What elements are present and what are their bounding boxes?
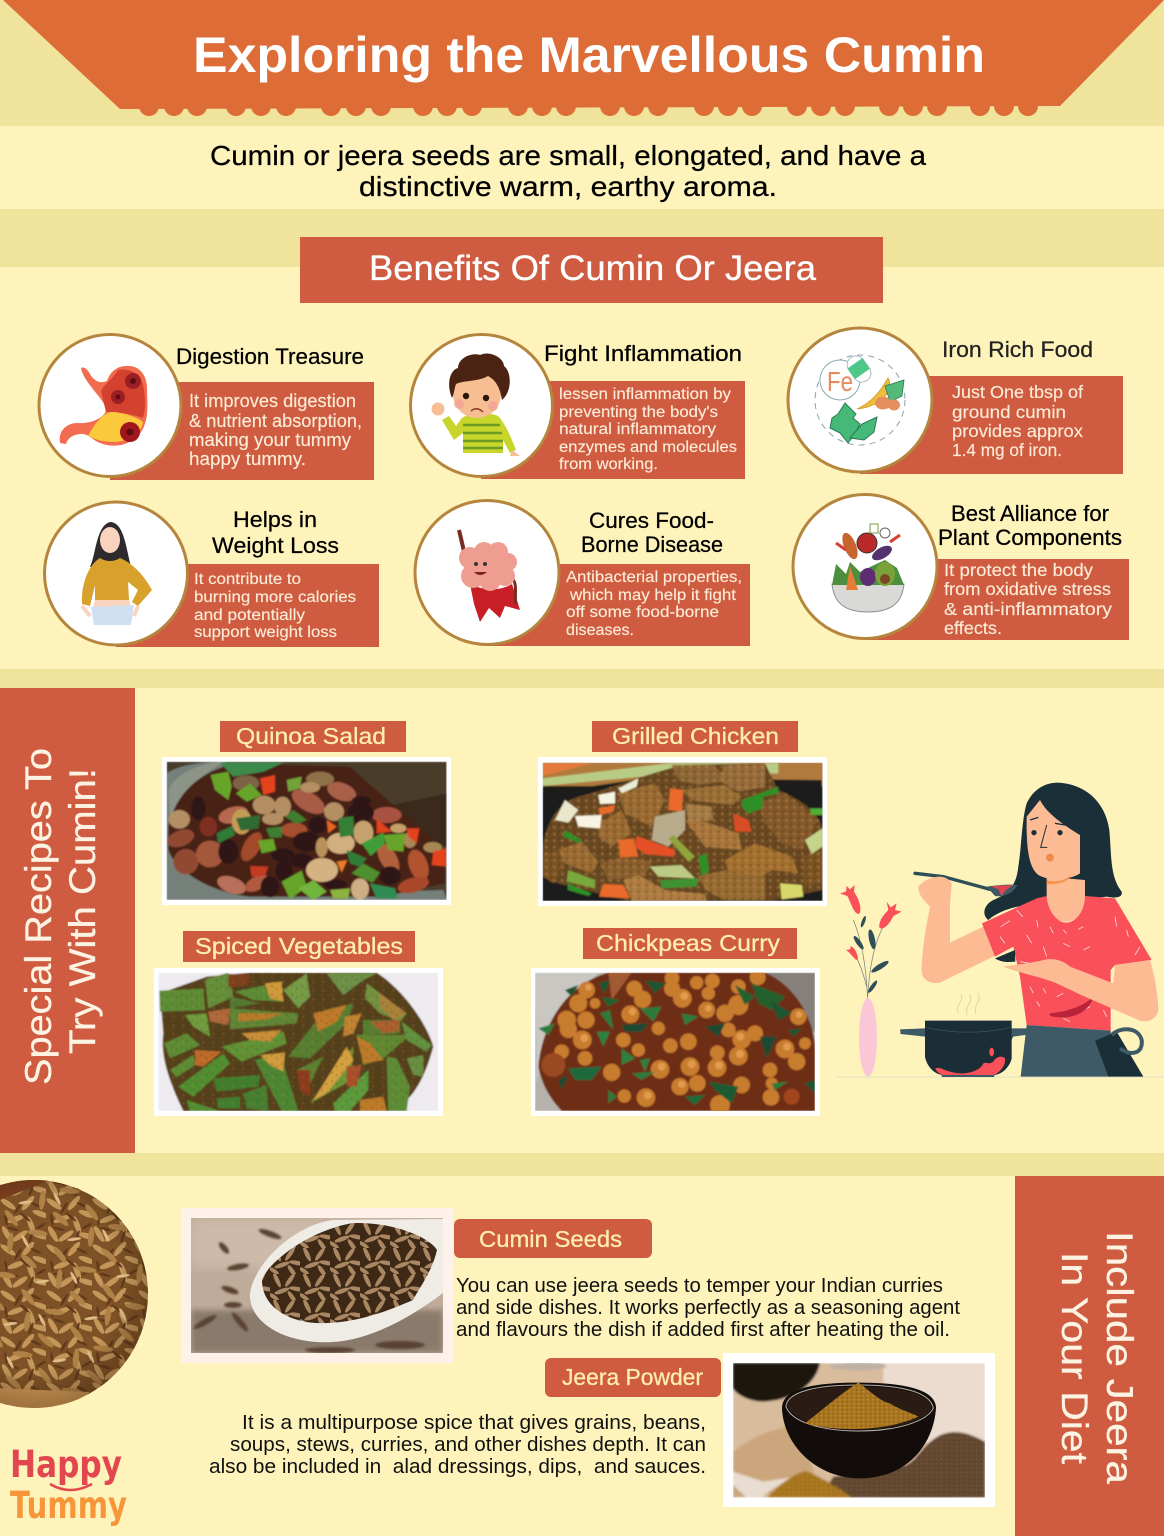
- body text: [944, 560, 1112, 638]
- label: chickpeas curry: Chickpeas Curry: [596, 930, 781, 956]
- body text: support weight loss: [194, 624, 337, 641]
- heading: Helps in: [233, 507, 317, 532]
- label: spiced vegetables: Spiced Vegetables: [195, 933, 403, 959]
- apron pocket and loop: [1095, 1029, 1143, 1077]
- body text: effects.: [944, 618, 1002, 638]
- logo: happy tummy: Happy: [10, 1443, 122, 1486]
- label: cumin seeds: [454, 1219, 652, 1258]
- body text: It contribute to: [194, 571, 301, 588]
- text: cumin seeds usage: and flavours the dish if added first after heating the oil.: [456, 1319, 950, 1341]
- icon: woman measuring waist: [44, 502, 188, 645]
- heading: Borne Disease: [581, 532, 723, 557]
- photo: chickpeas curry: [531, 968, 820, 1116]
- intro text: Cumin or jeera seeds are small, elongated, and have a: [210, 140, 926, 171]
- text: cumin seeds usage: and side dishes. It works perfectly as a seasoning agent: [456, 1297, 960, 1319]
- body text: burning more calories: [194, 589, 356, 606]
- label: jeera powder: Jeera Powder: [562, 1364, 703, 1390]
- text: jeera powder usage: soups, stews, curries, and other dishes depth. It can: [230, 1434, 706, 1456]
- body text: [952, 382, 1083, 460]
- card: digestion treasure: [39, 334, 374, 480]
- card: plant components: [793, 494, 1129, 640]
- label: cumin seeds: Cumin Seeds: [479, 1226, 622, 1252]
- header banner: [3, 0, 1164, 116]
- text: jeera powder usage: [209, 1412, 706, 1478]
- label: quinoa salad: Quinoa Salad: [236, 723, 386, 749]
- label: spiced vegetables: [183, 931, 415, 962]
- icon: brain with cape: [415, 500, 559, 644]
- body text: & nutrient absorption,: [189, 411, 362, 431]
- body text: natural inflammatory: [559, 421, 716, 438]
- body text: lessen inflammation by: [559, 386, 731, 403]
- body text: [559, 386, 737, 473]
- illustration: woman cooking: [837, 783, 1164, 1077]
- body text: ground cumin: [952, 402, 1066, 422]
- text: jeera powder usage: It is a multipurpose spice that gives grains, beans,: [242, 1412, 706, 1434]
- card: fight inflammation: [410, 334, 745, 479]
- apron: [1021, 1025, 1111, 1077]
- heading: Weight Loss: [212, 533, 339, 558]
- label: quinoa salad: [220, 721, 406, 752]
- icon: iron foods: [788, 328, 932, 472]
- body text: & anti-inflammatory: [944, 599, 1112, 619]
- neck and face: [1027, 800, 1085, 922]
- label: jeera powder: [545, 1358, 721, 1397]
- body text: preventing the body's: [559, 404, 718, 421]
- panel: recipes sidebar: Special Recipes To: [18, 748, 59, 1085]
- heading: Plant Components: [938, 525, 1122, 550]
- heading: Digestion Treasure: [176, 344, 364, 369]
- body text: off some food-borne: [566, 604, 719, 621]
- photo: quinoa salad: [162, 757, 451, 905]
- icon: iron foods: Fe: [827, 366, 853, 397]
- icon: sick boy: [410, 334, 552, 476]
- photo: grilled chicken: [538, 757, 827, 906]
- photo: spiced vegetables: [154, 968, 443, 1116]
- body text: and potentially: [194, 607, 305, 624]
- panel: include jeera sidebar: Include Jeera: [1099, 1231, 1140, 1484]
- intro text: [210, 140, 926, 202]
- body text: diseases.: [566, 622, 634, 639]
- ladle: [915, 873, 1017, 896]
- title: Exploring the Marvellous Cumin: [193, 27, 985, 83]
- panel: include jeera sidebar: [1015, 1176, 1164, 1536]
- heading: Fight Inflammation: [544, 341, 742, 366]
- text: cumin seeds usage: You can use jeera seeds to temper your Indian curries: [456, 1275, 943, 1297]
- panel: recipes sidebar: [0, 688, 135, 1153]
- body text: provides approx: [952, 421, 1083, 441]
- icon: vase: [859, 998, 877, 1077]
- intro text: distinctive warm, earthy aroma.: [359, 171, 777, 202]
- label: grilled chicken: [592, 721, 798, 752]
- photo: cumin seeds circle: [0, 1180, 148, 1416]
- heading: Cures Food-: [589, 508, 714, 533]
- card: iron rich food: [788, 328, 1123, 474]
- photo: cumin spoon: [181, 1208, 453, 1363]
- icon: cooking pot: [900, 1021, 1037, 1077]
- left arm: [918, 877, 997, 983]
- hair: [984, 783, 1122, 920]
- body text: Antibacterial properties,: [566, 569, 742, 586]
- ground line: [837, 1075, 1164, 1078]
- icon: salad bowl: [793, 494, 937, 638]
- heading: [581, 508, 723, 557]
- label: chickpeas curry: [583, 928, 797, 959]
- heading: Iron Rich Food: [942, 337, 1093, 362]
- body text: 1.4 mg of iron.: [952, 440, 1062, 460]
- text: jeera powder usage: also be included in alad dressings, dips, and sauces.: [209, 1456, 706, 1478]
- body text: from working.: [559, 456, 658, 473]
- steam: [958, 993, 979, 1015]
- shirt: [982, 896, 1152, 1031]
- heading: benefits: Benefits Of Cumin Or Jeera: [369, 249, 817, 288]
- text: cumin seeds usage: [456, 1275, 960, 1341]
- body text: Just One tbsp of: [952, 382, 1083, 402]
- body text: happy tummy.: [189, 449, 306, 469]
- heading: benefits: [300, 237, 883, 303]
- body text: It improves digestion: [189, 391, 356, 411]
- heading: Best Alliance for: [951, 501, 1109, 526]
- body text: making your tummy: [189, 430, 351, 450]
- heading: [212, 507, 339, 558]
- panel: include jeera sidebar: In Your Diet: [1054, 1252, 1095, 1465]
- body text: which may help it fight: [569, 587, 737, 604]
- panel: recipes sidebar: Try With Cumin!: [62, 768, 103, 1054]
- body text: [566, 569, 742, 639]
- heading: [938, 501, 1122, 550]
- card: food-borne disease: [415, 500, 750, 646]
- icon: stomach: [39, 334, 181, 476]
- body text: from oxidative stress: [944, 579, 1111, 599]
- logo: happy tummy: [10, 1443, 127, 1527]
- background bands: [0, 0, 1164, 1176]
- label: grilled chicken: Grilled Chicken: [612, 723, 779, 749]
- photo: jeera powder bowl: [723, 1353, 995, 1507]
- body text: [189, 391, 362, 469]
- body text: [194, 571, 356, 641]
- card: weight loss: [44, 502, 379, 647]
- icon: flowers: [840, 885, 902, 1000]
- body text: enzymes and molecules: [559, 439, 737, 456]
- right arm: [1003, 959, 1158, 1021]
- logo: happy tummy: Tummy: [10, 1484, 127, 1527]
- body text: It protect the body: [944, 560, 1093, 580]
